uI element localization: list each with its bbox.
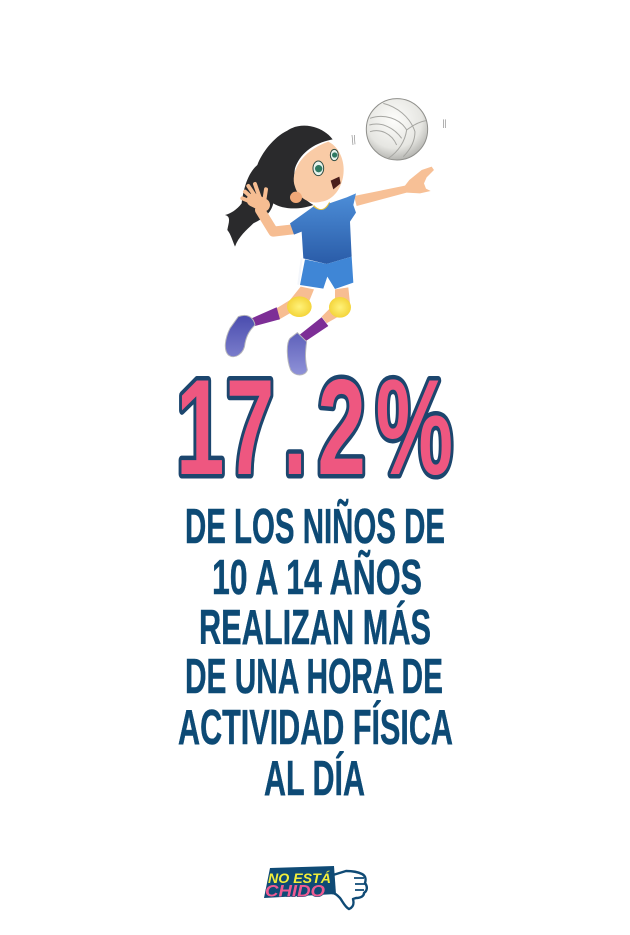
shirt xyxy=(290,193,356,264)
back leg xyxy=(322,287,350,323)
description text xyxy=(178,500,453,806)
raised arm xyxy=(354,167,434,206)
logo: No está chido xyxy=(264,866,367,909)
white stripe on shorts xyxy=(297,258,303,285)
mouth xyxy=(331,177,341,189)
ear xyxy=(290,192,302,203)
face xyxy=(294,142,344,203)
knee pads xyxy=(287,296,351,318)
eyes xyxy=(313,149,338,176)
motion lines xyxy=(352,119,445,145)
logo word: no está: NO ESTÁ xyxy=(268,870,331,886)
socks xyxy=(252,307,328,342)
illustration: girl hitting volleyball xyxy=(225,99,445,375)
icon: volleyball xyxy=(366,99,428,160)
line 6: AL DÍA xyxy=(264,752,365,806)
line 3: REALIZAN MÁS xyxy=(199,601,431,655)
logo backing xyxy=(264,866,336,898)
big statistic: 17.2% xyxy=(176,353,453,504)
shoes xyxy=(225,315,307,375)
line 2: 10 A 14 AÑOS xyxy=(212,551,422,605)
collar xyxy=(313,202,331,212)
front leg xyxy=(277,287,314,320)
icon: thumbs down xyxy=(332,871,367,909)
hair and ponytail xyxy=(225,126,333,247)
line 4: DE UNA HORA DE xyxy=(185,650,443,704)
line 1: DE LOS NIÑOS DE xyxy=(185,500,445,554)
logo word: chido: CHIDO xyxy=(265,882,325,900)
shorts xyxy=(300,257,353,289)
line 5: ACTIVIDAD FÍSICA xyxy=(178,701,453,755)
back arm and hand xyxy=(242,184,293,232)
